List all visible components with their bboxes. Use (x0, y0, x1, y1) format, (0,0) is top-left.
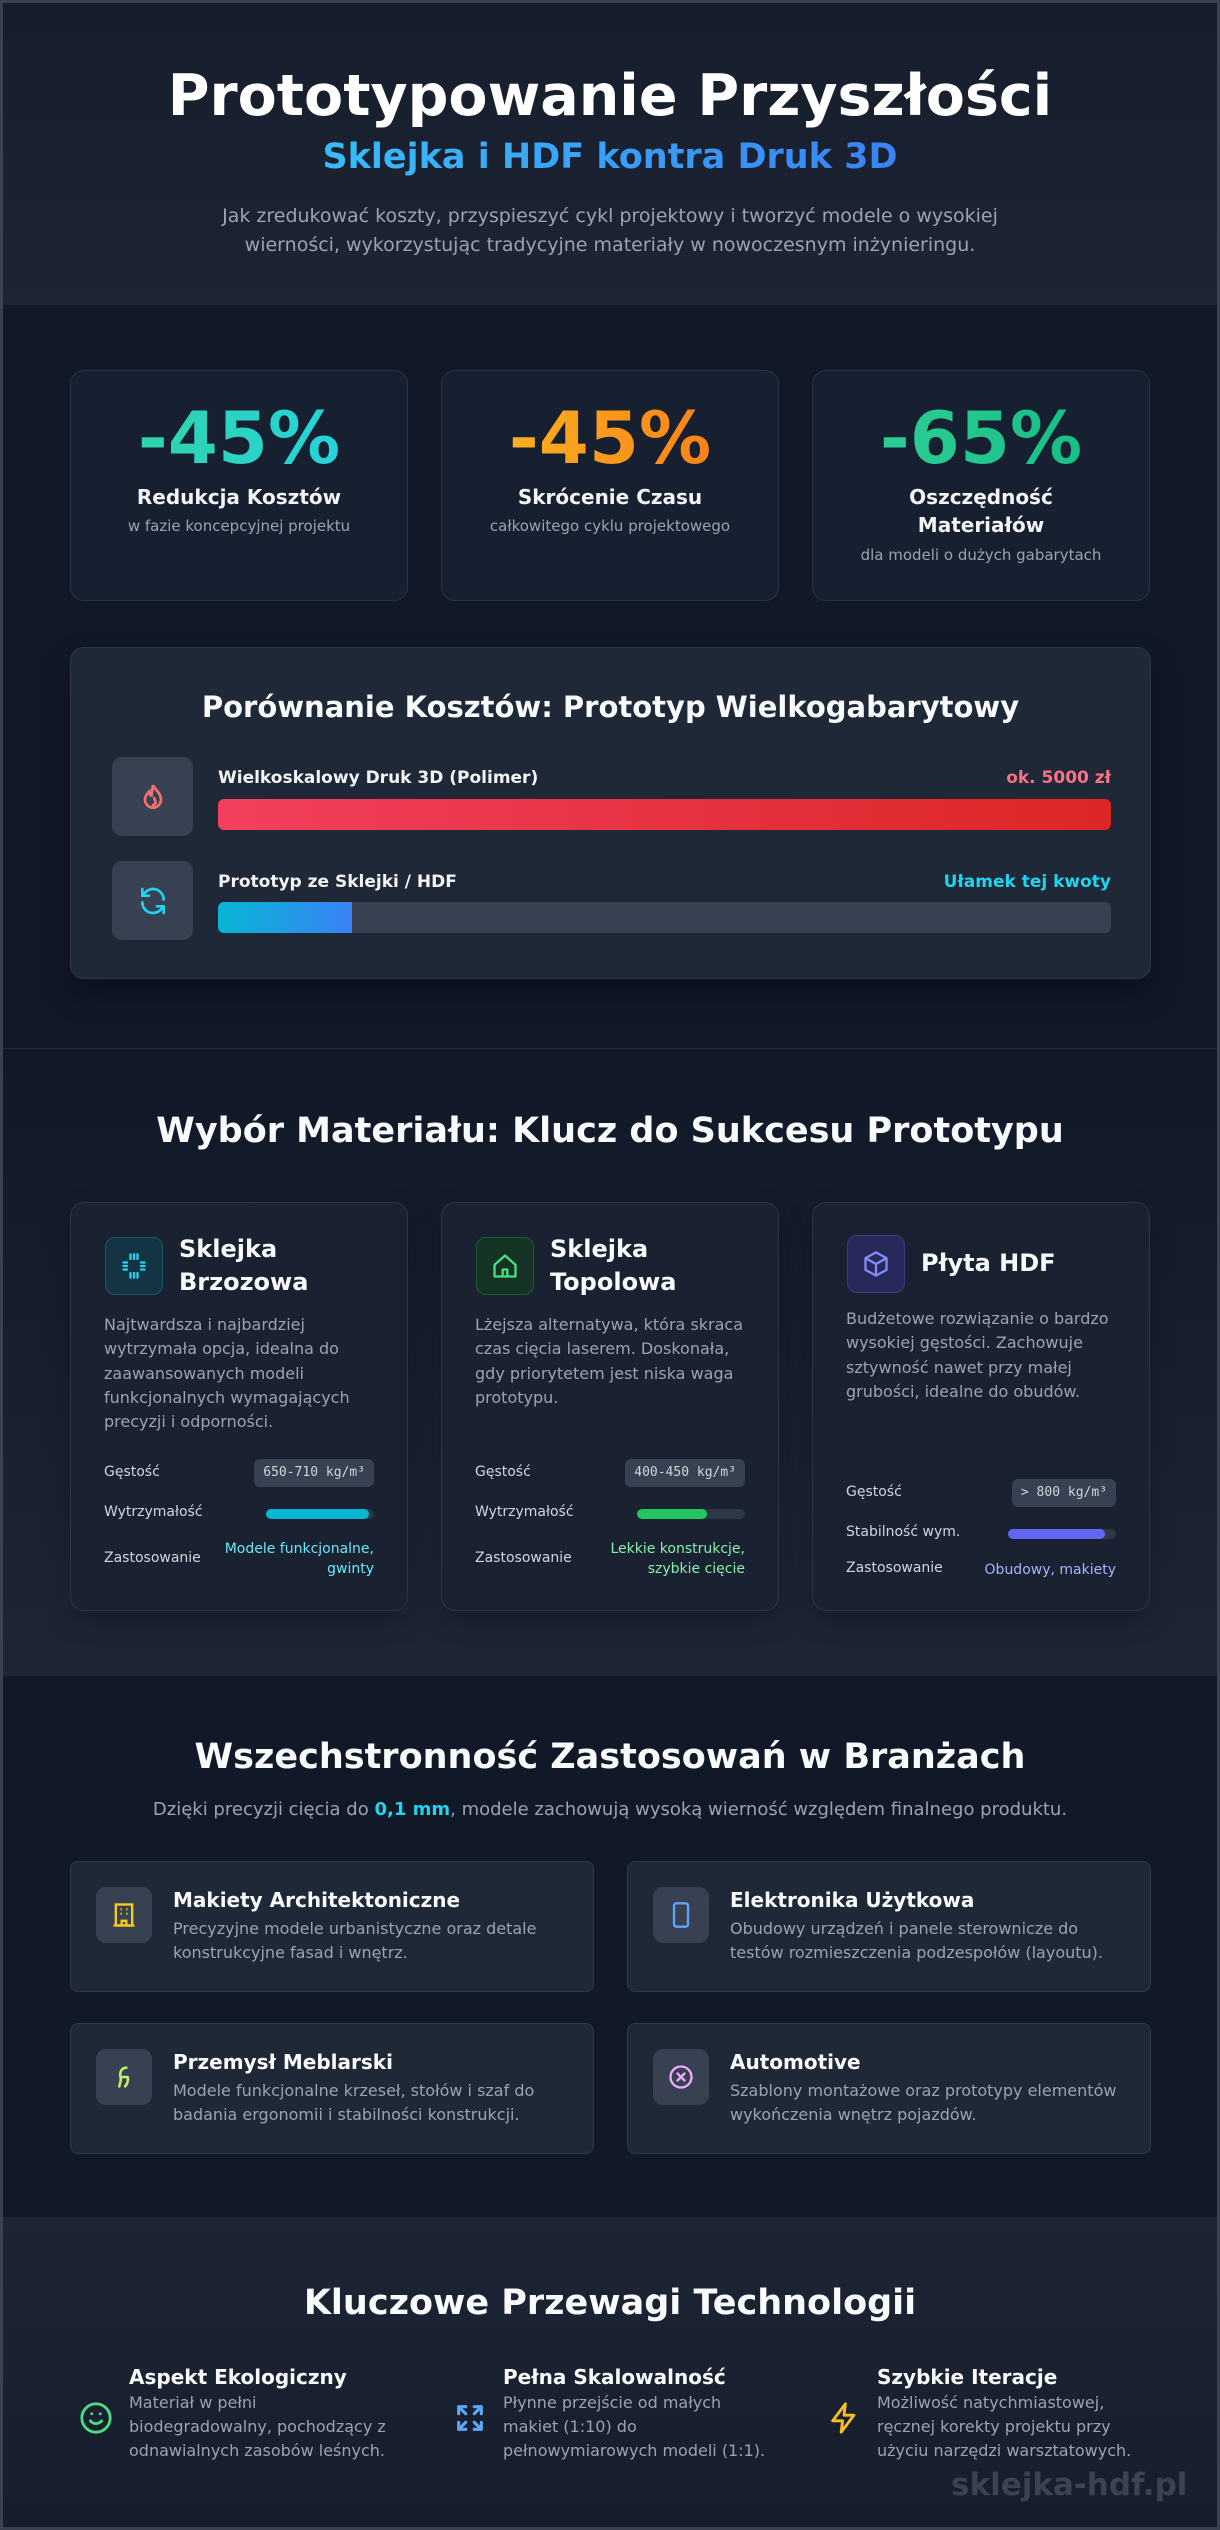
stat card: material: -65% (880, 396, 1082, 480)
app card: electronics: Elektronika Użytkowa (730, 1888, 974, 1912)
advantage: scale (457, 2365, 765, 2460)
icon: wheel (653, 2049, 709, 2105)
material card: HDF: Obudowy, makiety (985, 1562, 1116, 1578)
material card: poplar: 400-450 kg/m³ (634, 1465, 736, 1480)
description: Jak zredukować koszty, przyspieszyć cykl projektowy i tworzyć modele o wysokiej (222, 205, 998, 227)
material card: birch: Modele funkcjonalne, (225, 1541, 374, 1557)
icon: house (476, 1237, 534, 1295)
icon: building (96, 1887, 152, 1943)
stat card: material: dla modeli o dużych gabarytach (861, 546, 1101, 564)
material card: poplar (441, 1202, 779, 1611)
advantage: iterations (831, 2365, 1131, 2460)
material card: poplar: Zastosowanie (475, 1550, 572, 1566)
app card: furniture: Przemysł Meblarski (173, 2050, 393, 2074)
material card: birch (70, 1202, 408, 1611)
stat card: time (441, 370, 779, 601)
title: Prototypowanie Przyszłości (168, 63, 1052, 129)
stat card: time: Skrócenie Czasu (518, 485, 702, 509)
icon: chip (105, 1237, 163, 1295)
bar: plywood: Ułamek tej kwoty (944, 872, 1111, 892)
section: applications heading: Wszechstronność Zastosowań w Branżach (195, 1737, 1025, 1777)
advantage: eco: Aspekt Ekologiczny (129, 2365, 347, 2389)
header (3, 3, 1217, 305)
advantages heading: Kluczowe Przewagi Technologii (304, 2283, 916, 2323)
app card: automotive: Szablony montażowe oraz prototypy elementów wykończenia wnętrz pojazdów. (730, 2081, 1116, 2124)
advantage: iterations: użyciu narzędzi warsztatowych. (877, 2441, 1131, 2460)
advantage: scale: makiet (1:10) do (503, 2417, 637, 2436)
stat card: cost: -45% (138, 396, 340, 480)
material card: HDF: Płyta HDF (921, 1249, 1056, 1277)
material card: birch: Wytrzymałość (104, 1504, 203, 1520)
subtitle: Sklejka i HDF kontra Druk 3D (322, 137, 898, 177)
icon: cube (847, 1235, 905, 1293)
icon: flame (112, 757, 193, 836)
material card: birch: Najtwardsza i najbardziej wytrzymała opcja, idealna do zaawansowanych modeli funkcjonalnych wymagających precyzji i odporności. (104, 1315, 350, 1431)
stat card: cost: w fazie koncepcyjnej projektu (128, 517, 350, 535)
cost heading: Porównanie Kosztów: Prototyp Wielkogabarytowy (202, 690, 1019, 724)
stat card: material (812, 370, 1150, 601)
app card: automotive (627, 2023, 1151, 2154)
material card: birch: Sklejka (179, 1235, 277, 1263)
app card: furniture (70, 2023, 594, 2154)
applications subtext: Dzięki precyzji cięcia do 0,1 mm, modele zachowują wysoką wierność względem finalnego produktu. (153, 1799, 1067, 1820)
stat card: material: Oszczędność (909, 485, 1053, 509)
app card: electronics (627, 1861, 1151, 1992)
watermark: sklejka-hdf.pl (951, 2467, 1187, 2503)
material card: HDF: Budżetowe rozwiązanie o bardzo wysokiej gęstości. Zachowuje sztywność nawet przy małej grubości, idealne do obudów. (846, 1309, 1109, 1401)
material card: birch: gwinty (327, 1561, 374, 1577)
material card: HDF (812, 1202, 1150, 1611)
icon: smile (80, 2402, 112, 2434)
material card: HDF: Stabilność wym. (846, 1524, 960, 1540)
material card: poplar: Lżejsza alternatywa, która skraca czas cięcia laserem. Doskonała, gdy priorytetem jest niska waga prototypu. (475, 1315, 743, 1407)
material card: poplar: Sklejka (550, 1235, 648, 1263)
app card: electronics: Obudowy urządzeń i panele sterownicze do testów rozmieszczenia podzespołów (layoutu). (730, 1919, 1103, 1962)
material card: HDF: Zastosowanie (846, 1560, 943, 1576)
advantage: eco: Materiał w pełni (129, 2393, 256, 2412)
stat card: time: -45% (509, 396, 711, 480)
description: wierności, wykorzystując tradycyjne materiały w nowoczesnym inżynieringu. (245, 234, 975, 256)
material card: poplar: Gęstość (475, 1464, 531, 1480)
stat card: cost (70, 370, 408, 601)
advantage: eco (80, 2365, 386, 2460)
section: materials (3, 1048, 1217, 1676)
materials heading: Wybór Materiału: Klucz do Sukcesu Prototypu (156, 1111, 1064, 1151)
app card: furniture: Modele funkcjonalne krzeseł, stołów i szaf do badania ergonomii i stabilności konstrukcji. (173, 2081, 534, 2124)
material card: birch: 650-710 kg/m³ (263, 1465, 365, 1480)
icon: lightning (831, 2402, 856, 2434)
bar: plywood (218, 872, 1111, 933)
material card: poplar: Topolowa (550, 1268, 676, 1296)
advantage: scale: pełnowymiarowych modeli (1:1). (503, 2441, 765, 2460)
icon: expand (457, 2405, 483, 2431)
description (221, 205, 998, 256)
icon: refresh (112, 861, 193, 940)
stat card: time: całkowitego cyklu projektowego (490, 517, 730, 535)
app card: architecture: Precyzyjne modele urbanistyczne oraz detale konstrukcyjne fasad i wnętrz. (173, 1919, 536, 1962)
panel: cost comparison (70, 647, 1151, 979)
stat card: material: Materiałów (918, 513, 1044, 537)
icon: chair (96, 2049, 152, 2105)
material card: HDF: > 800 kg/m³ (1021, 1485, 1107, 1500)
icon: phone (653, 1887, 709, 1943)
advantage: eco: biodegradowalny, pochodzący z (129, 2417, 386, 2436)
advantage: iterations: Szybkie Iteracje (877, 2365, 1057, 2389)
advantage: eco: odnawialnych zasobów leśnych. (129, 2441, 385, 2460)
material card: birch: Zastosowanie (104, 1550, 201, 1566)
section: advantages (3, 2217, 1217, 2530)
material card: birch: Gęstość (104, 1464, 160, 1480)
material card: HDF: Gęstość (846, 1484, 902, 1500)
material card: poplar: Wytrzymałość (475, 1504, 574, 1520)
bar: 3D print: ok. 5000 zł (1006, 768, 1111, 788)
advantage: scale: Pełna Skalowalność (503, 2365, 726, 2389)
material card: poplar: Lekkie konstrukcje, (610, 1541, 745, 1557)
bar: plywood: Prototyp ze Sklejki / HDF (218, 872, 457, 892)
material card: poplar: szybkie cięcie (648, 1561, 745, 1577)
bar: 3D print: Wielkoskalowy Druk 3D (Polimer) (218, 768, 538, 788)
app card: automotive: Automotive (730, 2050, 861, 2074)
bar: 3D print (218, 768, 1112, 830)
advantage: iterations: Możliwość natychmiastowej, (877, 2393, 1104, 2412)
stat card: cost: Redukcja Kosztów (137, 485, 341, 509)
advantage: scale: Płynne przejście od małych (503, 2393, 721, 2412)
material card: birch: Brzozowa (179, 1268, 308, 1296)
app card: architecture (70, 1861, 594, 1992)
advantage: iterations: ręcznej korekty projektu przy (877, 2417, 1111, 2436)
app card: architecture: Makiety Architektoniczne (173, 1888, 460, 1912)
